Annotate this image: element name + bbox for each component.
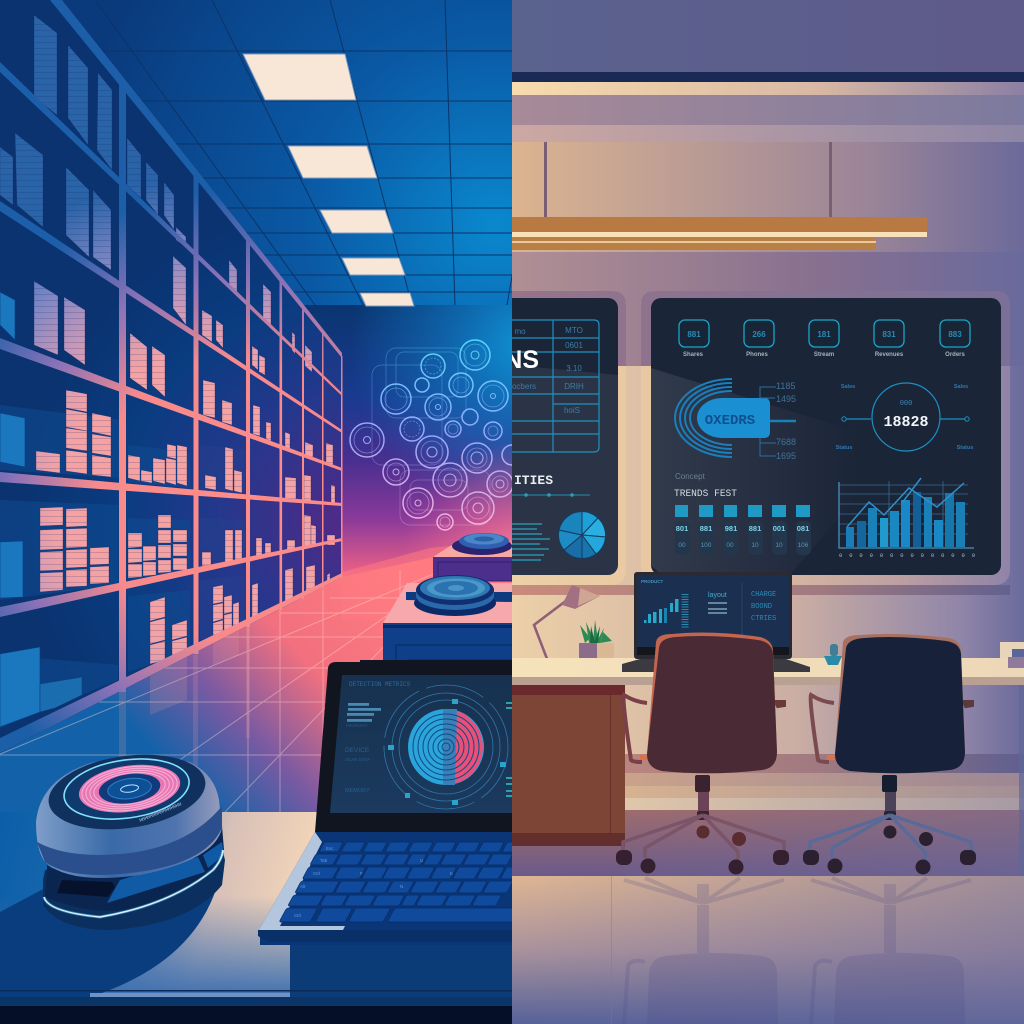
metric columns: 881 (700, 524, 712, 533)
KPI labels: Orders (945, 352, 965, 358)
gauge pill: OXEDRS (705, 413, 755, 429)
chair casters (616, 826, 789, 874)
potted plant (579, 620, 614, 669)
KPI values: 181 (817, 330, 831, 339)
shelf boards (0, 0, 342, 753)
laptop chart title: PRODUCT (641, 579, 664, 584)
upper wall shade (512, 250, 1024, 366)
metric columns: 10 (751, 542, 759, 549)
screen labels: SCAN DATA (345, 757, 370, 762)
gauge values (776, 381, 796, 461)
desk surface (0, 812, 512, 1024)
key labels: Ctrl (313, 871, 320, 876)
chair stem (882, 775, 897, 792)
central ring metric (842, 383, 969, 451)
robot device in foreground (36, 745, 225, 930)
laptop in foreground (258, 662, 512, 945)
laptop lid (315, 662, 512, 832)
gauge values: 1695 (776, 451, 796, 461)
near pedestal with robot disc (360, 575, 512, 663)
neural network cloud of glowing circles (350, 340, 522, 530)
metric columns: 106 (798, 542, 809, 549)
metric columns: 00 (678, 542, 686, 549)
laptop on desk (622, 572, 810, 672)
table values: mo (514, 327, 526, 336)
upper shell (36, 757, 222, 878)
chair backrest (835, 634, 965, 773)
metric columns: 081 (797, 524, 809, 533)
bar and line chart (839, 478, 975, 559)
main dashboard frame (641, 291, 1010, 585)
circuit outlines (372, 348, 490, 525)
shadow band below screens (512, 585, 1010, 595)
laptop tick lines (682, 594, 688, 628)
ring side labels: Sales (841, 384, 855, 390)
small caption: Concept (675, 472, 706, 481)
screen labels: DEVICE (345, 747, 370, 754)
keyboard keys (280, 842, 512, 922)
laptop text blocks: layout (708, 592, 727, 599)
ring side labels: Status (957, 445, 973, 451)
concentric arcs gauge (675, 379, 732, 457)
table values (512, 326, 584, 415)
desk lamp (525, 585, 600, 670)
chair 1 (616, 633, 789, 874)
rim label: HHHHHHHHHHHHHHHH (139, 801, 182, 824)
gauge values: 7688 (776, 437, 796, 447)
laptop text blocks: BOOND (751, 603, 772, 611)
ceiling light panels (243, 54, 414, 306)
ring side labels: Sales (954, 384, 968, 390)
metric columns: 00 (726, 542, 734, 549)
laptop text blocks (708, 583, 776, 635)
keyboard base (260, 832, 512, 945)
section heading: ITIES (514, 473, 553, 488)
KPI labels: Stream (814, 352, 834, 358)
pie chart (558, 511, 606, 559)
KPI icon tiles (679, 320, 970, 347)
bright blue boxes at left (0, 292, 82, 727)
gauge connectors (760, 387, 796, 456)
laptop text blocks: CTRIES (751, 615, 776, 623)
screen labels (345, 723, 370, 794)
KPI labels: Shares (683, 352, 704, 358)
ring side labels (836, 384, 973, 451)
gauge values: 1495 (776, 394, 796, 404)
key labels: U (420, 858, 423, 863)
far wall blue glow (368, 305, 512, 498)
KPI values (687, 330, 962, 339)
bar and line chart: 0 0 0 0 0 0 0 0 0 0 0 0 0 0 (839, 552, 975, 559)
laptop mini bars (644, 599, 678, 623)
metric columns: 100 (701, 542, 712, 549)
lower blue panels (107, 857, 205, 903)
laptop screen (330, 675, 512, 813)
key labels: Tab (320, 858, 328, 863)
gauge pill (697, 398, 770, 438)
section rule (512, 493, 590, 497)
metric columns: 801 (676, 524, 688, 533)
key labels: N (400, 884, 403, 889)
central ring metric: 000 (900, 400, 912, 408)
list lines (512, 524, 550, 560)
table values: DRIH (564, 382, 584, 391)
small teal bowl (824, 644, 842, 665)
KPI values: 883 (948, 330, 962, 339)
chair stem (695, 775, 710, 792)
left dashboard frame (485, 291, 626, 585)
desk tray at right edge (1000, 642, 1024, 668)
gauge values: 1185 (776, 381, 795, 391)
far wall background (290, 300, 512, 600)
screen bars (347, 703, 381, 722)
upper tan band (512, 142, 1024, 252)
chair legs (623, 815, 784, 860)
metric columns: 10 (775, 542, 783, 549)
table values: ocbers (512, 382, 536, 391)
metric columns: 881 (749, 524, 761, 533)
screen labels: PROPERTY (346, 723, 368, 728)
key labels (294, 846, 453, 918)
ring side labels: Status (836, 445, 852, 451)
glossy floor (512, 876, 1024, 1024)
under desk wall bands (512, 685, 1024, 1024)
metric columns: 981 (725, 524, 737, 533)
robot shadow (0, 889, 215, 997)
ceiling with grid and lights (62, 0, 512, 306)
KPI labels: Phones (746, 352, 768, 358)
key labels: F (360, 871, 363, 876)
table values: 0601 (565, 341, 583, 350)
chair arms (811, 695, 834, 762)
screen labels: MEMORY (345, 788, 370, 794)
section title: TRENDS FEST (674, 489, 737, 500)
screen title: DETECTION METRICS (349, 681, 411, 688)
far wall pink glow (417, 446, 512, 550)
table values: 3.10 (566, 364, 582, 373)
metric columns: 001 (773, 524, 785, 533)
chair backrest (647, 633, 777, 773)
chair casters (803, 826, 976, 874)
office ceiling (512, 0, 1024, 142)
chair 2 (803, 634, 976, 874)
key labels: Ctrl (294, 913, 301, 918)
laptop text blocks: CHARGE (751, 591, 776, 599)
KPI values: 831 (882, 330, 896, 339)
radar rings chart (384, 685, 512, 809)
KPI labels (683, 352, 965, 358)
chair arms (624, 695, 647, 762)
suspended light fixture (512, 142, 927, 250)
table values: MTO (565, 326, 583, 335)
central ring metric: 18828 (883, 414, 929, 431)
chair reflections on floor (624, 878, 971, 1024)
key labels: Esc (326, 846, 334, 851)
left scene: automated warehouse (0, 0, 512, 1024)
office desk (512, 658, 1024, 685)
shelving wall (0, 0, 342, 753)
striped backing stock inside cells (0, 405, 213, 728)
floor with perspective grid (0, 540, 512, 812)
KPI labels: Revenues (875, 352, 904, 358)
stored boxes on shelves (0, 15, 335, 727)
brown desk cabinet (512, 685, 625, 846)
key labels: Alt (300, 884, 306, 889)
shelf posts (119, 80, 342, 692)
KPI values: 881 (687, 330, 701, 339)
main dashboard panel (651, 298, 1001, 575)
glowing top disc (48, 754, 206, 830)
far pedestal with robot disc (433, 533, 512, 581)
left dashboard panel (490, 298, 618, 575)
table values: hoiS (564, 406, 580, 415)
key labels: K (450, 871, 453, 876)
chair legs (810, 815, 971, 860)
KPI values: 266 (752, 330, 766, 339)
right scene: office with dashboards (485, 0, 1024, 1024)
table (512, 320, 599, 452)
cropped heading: ONS (485, 346, 539, 374)
metric columns (675, 505, 811, 555)
LED strip (44, 850, 223, 917)
wall (512, 366, 1024, 658)
dark sensor window (57, 880, 115, 897)
